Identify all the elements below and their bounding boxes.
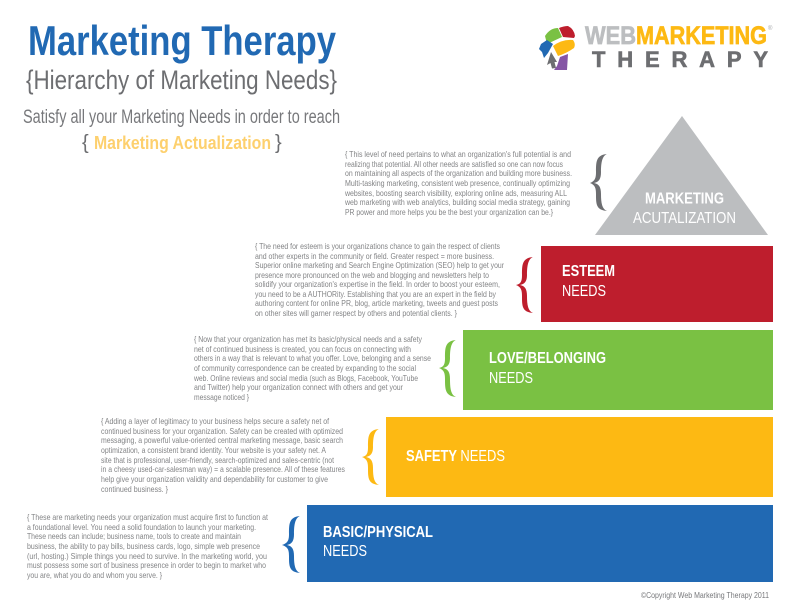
description xyxy=(193,334,431,402)
description xyxy=(255,241,504,318)
description: you are, what you do and whom you serve. } xyxy=(27,570,162,580)
marketing actualization tagline: { xyxy=(82,132,89,154)
description: presence more pronounced on the web and blogging and newsletters help to xyxy=(255,270,489,280)
logo wordmark: WEB xyxy=(585,22,636,50)
panel: esteem needs xyxy=(255,241,773,322)
description: Multi-tasking marketing, consistent web presence, continually optimizing xyxy=(345,178,570,188)
subtitle: {Hierarchy of Marketing Needs} xyxy=(26,65,337,95)
description: net of continued business is created, you can focus on connecting with xyxy=(194,344,411,354)
description: Superior online marketing and Search Engine Optimization (SEO) help to get your xyxy=(255,260,504,270)
panel: basic/physical needs: NEEDS xyxy=(323,543,367,560)
bar xyxy=(307,505,773,582)
icon: head xyxy=(539,26,575,70)
brace xyxy=(282,516,300,573)
description: realizing that potential. All other needs are satisfied so one can now focus xyxy=(345,159,563,169)
description: web. Online reviews and social media (such as Blogs, Facebook, YouTube xyxy=(193,373,418,383)
description: { Now that your organization has met its basic/physical needs and a safety xyxy=(194,334,423,344)
description: you need to be a AUTHORity. Establishing that you are an expert in the field by xyxy=(255,289,497,299)
description: of community correspondence can be created by expanding to the social xyxy=(194,363,416,373)
description: websites, boosting search visibility, exploring online ads, measuring ALL xyxy=(344,188,567,198)
description: continued business. } xyxy=(101,484,168,494)
bar label: ESTEEM xyxy=(562,263,615,280)
description: continued business for your organization. Safety can be created with optimized xyxy=(101,426,343,436)
tagline: Satisfy all your Marketing Needs in order to reach xyxy=(23,107,340,128)
bar xyxy=(463,330,773,410)
title: Marketing Therapy xyxy=(28,17,337,64)
description: message noticed } xyxy=(194,392,249,402)
marketing actualization tagline: } xyxy=(275,132,282,154)
panel: love/belonging needs xyxy=(193,330,773,410)
description: optimization, a consistent brand identity. Your website is your safety net. A xyxy=(101,445,326,455)
description xyxy=(27,512,268,580)
description: messaging, a powerful value-oriented central marketing message, basic search xyxy=(101,435,343,445)
brace xyxy=(516,257,533,313)
logo: MARKETING xyxy=(636,22,767,50)
brace xyxy=(439,340,456,397)
panel: marketing actualization: ACUTALIZATION xyxy=(633,210,736,227)
description: a foundational level. You need a solid foundation to launch your marketing. xyxy=(27,522,256,532)
panel: marketing actualization xyxy=(344,116,768,235)
description: and Twitter) help your organization connect with others and get your xyxy=(194,382,403,392)
copyright: ©Copyright Web Marketing Therapy 2011 xyxy=(641,591,769,600)
description: PR power and more helps you be the best your organization can be.} xyxy=(345,207,553,217)
bar xyxy=(386,417,773,497)
description: solidify your organization's expertise in the field. In order to boost your esteem, xyxy=(255,279,500,289)
marketing actualization tagline: Marketing Actualization xyxy=(94,133,271,153)
description xyxy=(344,149,572,217)
description: business, the ability to pay bills, business cards, logo, simple web presence xyxy=(27,541,260,551)
description xyxy=(101,416,345,494)
description: (url, hosting.) Simple things you need to survive. In the marketing world, you xyxy=(27,551,267,561)
panel: basic/physical needs xyxy=(27,505,773,582)
description: { The need for esteem is your organizations chance to gain the respect of clients xyxy=(255,241,500,251)
description: in a cheesy used-car-salesman way) = a scalable presence. All of these features xyxy=(101,464,345,474)
pyramid label: MARKETING xyxy=(645,190,724,208)
description: { This level of need pertains to what an organization's full potential is and xyxy=(345,149,571,159)
bar label: BASIC/PHYSICAL xyxy=(323,524,433,541)
bar xyxy=(541,246,773,322)
pyramid xyxy=(595,116,768,235)
panel: safety needs xyxy=(101,416,773,497)
panel: esteem needs: NEEDS xyxy=(562,283,606,300)
description: on maintaining all aspects of the organization and building more business. xyxy=(345,168,572,178)
description: help give your organization validity and dependability for customer to give xyxy=(101,474,328,484)
description: on other sites will garner respect by others and potential clients. } xyxy=(255,308,457,318)
description: and other experts in the community or field. Greater respect = more business. xyxy=(255,251,494,261)
description: others in a way that is relevant to what you offer. Love, belonging and a sense xyxy=(194,353,431,363)
description: { Adding a layer of legitimacy to your business helps secure a safety net of xyxy=(101,416,329,426)
logo: ® xyxy=(768,25,773,32)
brace xyxy=(590,154,607,211)
logo: THERAPY xyxy=(592,47,768,72)
brace xyxy=(362,429,379,485)
bar label: LOVE/BELONGING xyxy=(489,350,606,367)
description: { These are marketing needs your organization must acquire first to function at xyxy=(27,512,268,522)
description: These needs can include; business name, tools to create and maintain xyxy=(27,531,241,541)
logo xyxy=(539,22,773,72)
description: web marketing with web analytics, building social media strategy, gaining xyxy=(344,197,570,207)
description: authoring content for online PR, blog, article marketing, tweets and guest posts xyxy=(255,298,498,308)
panel: love/belonging needs: NEEDS xyxy=(489,370,533,387)
description: site that is professional, user-friendly, search-optimized and sales-centric (not xyxy=(101,455,334,465)
description: must possess some sort of business presence in order to begin to market who xyxy=(27,560,266,570)
bar label: SAFETY NEEDS xyxy=(406,448,505,465)
